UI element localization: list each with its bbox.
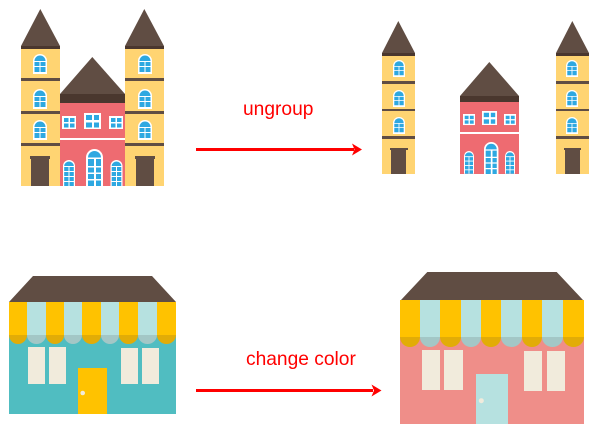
striped awning xyxy=(9,302,176,344)
salmon shop after color change xyxy=(400,272,584,424)
yellow door xyxy=(78,368,107,414)
separated central house xyxy=(460,62,519,174)
recolored wall xyxy=(400,337,584,424)
central house xyxy=(60,57,125,186)
arrow: change color xyxy=(196,384,382,396)
recolored shop windows xyxy=(422,350,565,391)
recolored shop roof xyxy=(401,272,583,300)
light blue door xyxy=(476,374,508,424)
arrow: ungroup xyxy=(196,144,362,156)
shop windows xyxy=(28,347,159,384)
separated right tower xyxy=(556,21,589,174)
separated left tower xyxy=(382,21,415,174)
shop wall xyxy=(9,335,176,414)
label: change color: change color xyxy=(246,349,356,370)
teal shop before color change xyxy=(9,276,176,414)
castle before ungrouping xyxy=(21,9,164,186)
left tower xyxy=(21,9,60,186)
label: ungroup: ungroup xyxy=(243,99,313,120)
recolored awning xyxy=(400,300,584,347)
right tower xyxy=(125,9,164,186)
shop roof xyxy=(9,276,176,302)
castle after ungrouping xyxy=(382,21,589,174)
